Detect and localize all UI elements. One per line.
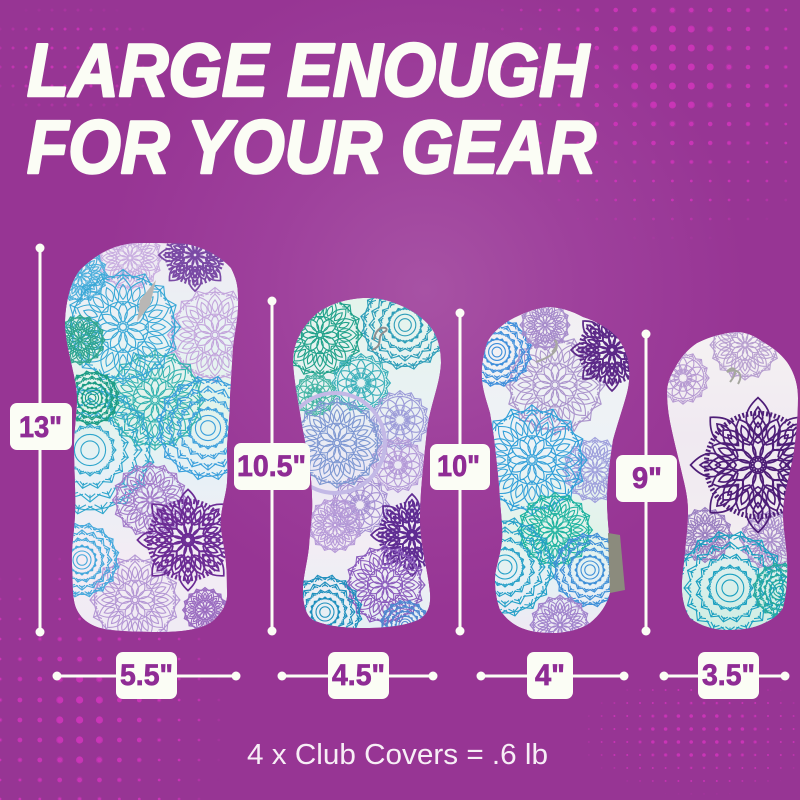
width measure: 3.5 inches: 3.5"	[702, 659, 755, 692]
footer weight note: 4 x Club Covers = .6 lb	[247, 739, 548, 771]
width measure: 4 inches	[476, 652, 628, 699]
width measure: 4.5 inches: 4.5"	[332, 659, 385, 692]
embroidered logo mark	[137, 280, 156, 322]
embroidered logo mark	[727, 368, 740, 384]
height measure: 9 inches: 9"	[632, 462, 662, 495]
title	[27, 28, 596, 189]
width measure: 4.5 inches	[278, 652, 438, 699]
club cover 4: putter-size	[667, 332, 798, 630]
halftone dots: bottom right	[588, 678, 794, 794]
height measure: 10 inches: 10"	[437, 450, 480, 483]
embroidered logo mark	[372, 328, 387, 350]
club cover 2: fairway wood	[293, 298, 441, 628]
width measure: 5.5 inches: 5.5"	[120, 659, 173, 692]
title line 2: FOR YOUR GEAR	[27, 105, 596, 189]
height measure: 9 inches	[616, 330, 677, 636]
halftone dots: bottom left	[0, 559, 240, 799]
width measure: 3.5 inches	[660, 652, 790, 699]
width measure: 4 inches: 4"	[535, 659, 565, 692]
height measure: 13 inches	[10, 244, 72, 636]
height measure: 13 inches: 13"	[19, 411, 62, 444]
embroidered logo mark	[536, 340, 557, 362]
halftone dots: top right and top left	[0, 10, 800, 238]
club cover 3: hybrid	[482, 307, 630, 633]
club cover 1: driver	[65, 243, 238, 632]
height measure: 10.5 inches	[234, 296, 310, 636]
sewn tag	[608, 533, 625, 593]
title line 1: LARGE ENOUGH	[27, 28, 591, 112]
height measure: 10.5 inches: 10.5"	[237, 450, 306, 483]
height measure: 10 inches	[430, 308, 490, 636]
width measure: 5.5 inches	[52, 652, 240, 699]
